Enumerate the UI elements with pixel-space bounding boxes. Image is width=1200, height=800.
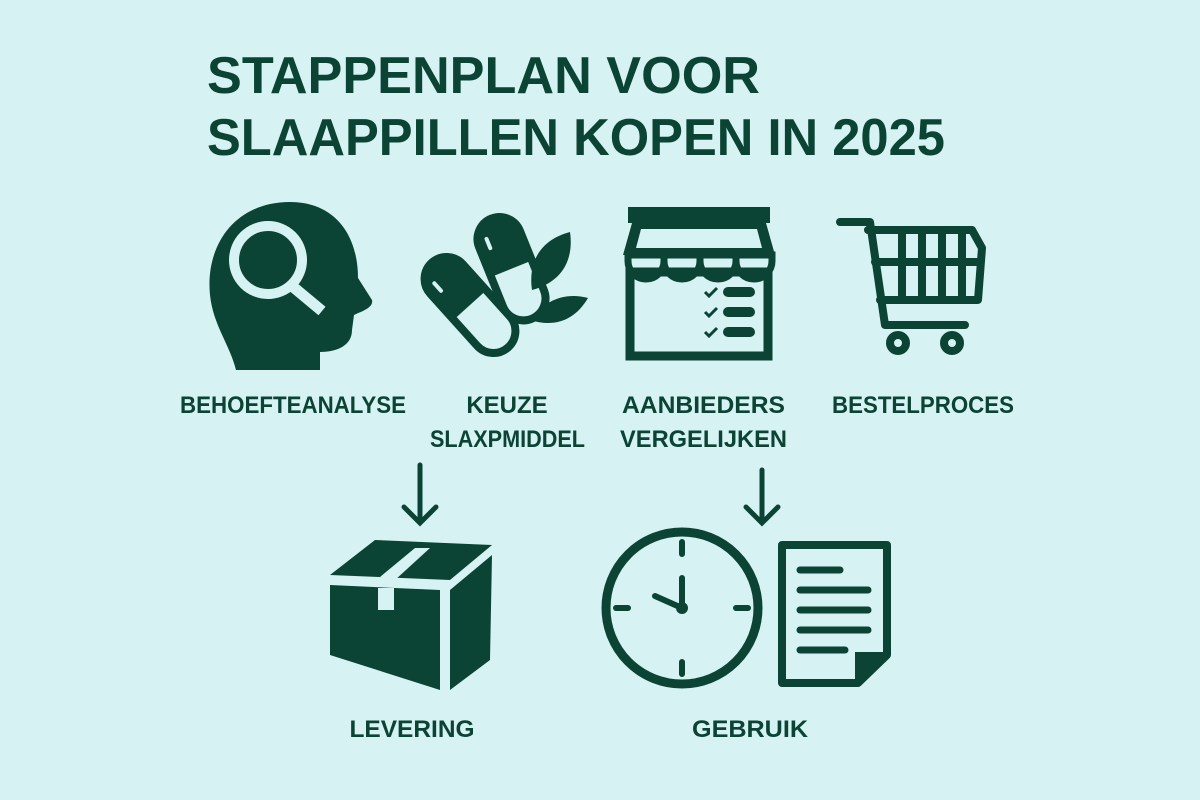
title: STAPPENPLAN VOOR [207,47,760,105]
label: behoefteanalyse: BEHOEFTEANALYSE [180,392,406,419]
arrow: to gebruik [746,470,778,523]
icon: box [330,540,492,690]
label: aanbieders vergelijken [620,392,787,453]
icon: document [782,545,887,683]
arrow: to levering [404,465,436,523]
label: aanbieders vergelijken: AANBIEDERS [622,392,785,419]
icon: shopping cart [840,222,982,351]
label: keuze slaapmiddel: SLAXPMIDDEL [430,426,585,453]
title: SLAAPPILLEN KOPEN IN 2025 [207,109,945,167]
title [207,47,945,167]
label: bestelproces: BESTELPROCES [832,392,1014,419]
label: keuze slaapmiddel [430,392,585,453]
icon: store [623,207,775,356]
label: levering: LEVERING [350,716,474,743]
icon: head with magnifier [209,202,372,370]
label: keuze slaapmiddel: KEUZE [466,392,548,419]
icon: clock [606,532,758,684]
icon: pills and leaves [416,210,588,362]
label: gebruik: GEBRUIK [692,716,809,743]
label: aanbieders vergelijken: VERGELIJKEN [620,426,787,453]
